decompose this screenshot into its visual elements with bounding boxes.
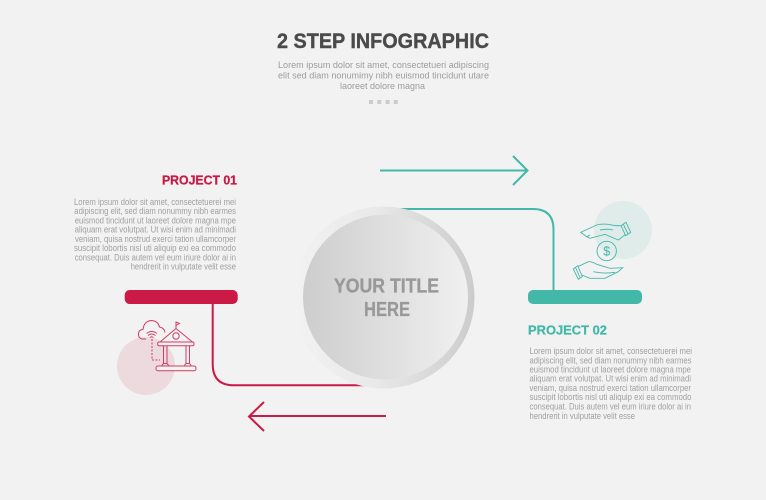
center title: YOUR TITLE <box>334 276 439 298</box>
connector: red <box>213 302 370 385</box>
panel: project 02 <box>528 201 692 421</box>
header <box>277 29 489 104</box>
project 01 body text: hendrerit in vulputate velit esse <box>131 262 236 272</box>
project 01 body text <box>74 197 237 272</box>
project 01 body text: consequat. Duis autem vel eum iriure dolor ai in <box>75 252 236 262</box>
project 02 body text: veniam, quisa nostrud exerci tation ullamcorper <box>530 383 691 393</box>
panel: project 01 <box>74 172 238 395</box>
arrow: teal right <box>380 156 528 185</box>
icon: hands and coin <box>573 222 631 279</box>
project 02 body text: consequat. Duis autem vel eum iriure dolor ai in <box>530 402 691 412</box>
project 01 body text: Lorem ipsum dolor sit amet, consectetuerei mei <box>74 197 236 207</box>
project 01 body text: veniam, quisa nostrud exerci tation ullamcorper <box>75 234 236 244</box>
project 02 body text: hendrerit in vulputate velit esse <box>530 411 635 421</box>
icon backdrop: pink circle <box>117 337 175 395</box>
icon backdrop: teal circle <box>594 201 652 259</box>
center title <box>334 276 439 321</box>
project 01 bar <box>125 290 238 304</box>
subtitle <box>278 60 489 92</box>
project 02 body text: adipiscing elit, sed diam nonummy nibh earmes <box>530 355 692 365</box>
project 02 body text: suscipit lobortis nisl uti aliquip exi ea commodo <box>530 392 692 402</box>
center title: HERE <box>364 299 410 321</box>
project 01 heading: PROJECT 01 <box>162 172 237 187</box>
project 02 body text: Lorem ipsum dolor sit amet, consectetuerei mei <box>530 346 692 356</box>
center circle <box>292 206 474 388</box>
icon: cloud and bank <box>138 320 196 371</box>
project 01 body text: aliquam erat volutpat. Ut wisi enim ad minimadi <box>75 225 236 235</box>
icon: hands and coin: $ <box>603 244 610 258</box>
connector: teal <box>400 209 554 292</box>
project 01 body text: suscipit lobortis nisl uti aliquip exi ea commodo <box>74 243 236 253</box>
project 02 heading: PROJECT 02 <box>528 322 607 337</box>
subtitle: laoreet dolore magna <box>340 81 426 92</box>
project 02 body text <box>530 346 692 421</box>
subtitle: elit sed diam nonumimy nibh euismod tincidunt utare <box>278 70 489 82</box>
subtitle: Lorem ipsum dolor sit amet, consectetueri adipiscing <box>278 60 489 71</box>
project 02 body text: euismod tincidunt ut laoreet dolore magna mpe <box>530 364 691 374</box>
project 01 body text: adipiscing elit, sed diam nonummy nibh earmes <box>74 206 237 216</box>
arrow: red left <box>249 402 386 431</box>
project 01 body text: euismod tincidunt ut laoreet dolore magna mpe <box>75 216 236 226</box>
header dots <box>369 100 398 104</box>
project 02 bar <box>528 290 642 304</box>
title: 2 STEP INFOGRAPHIC <box>277 29 489 53</box>
inner disc <box>303 214 468 380</box>
project 02 body text: aliquam erat volutpat. Ut wisi enim ad minimadi <box>530 374 691 384</box>
outer ring <box>292 206 474 388</box>
